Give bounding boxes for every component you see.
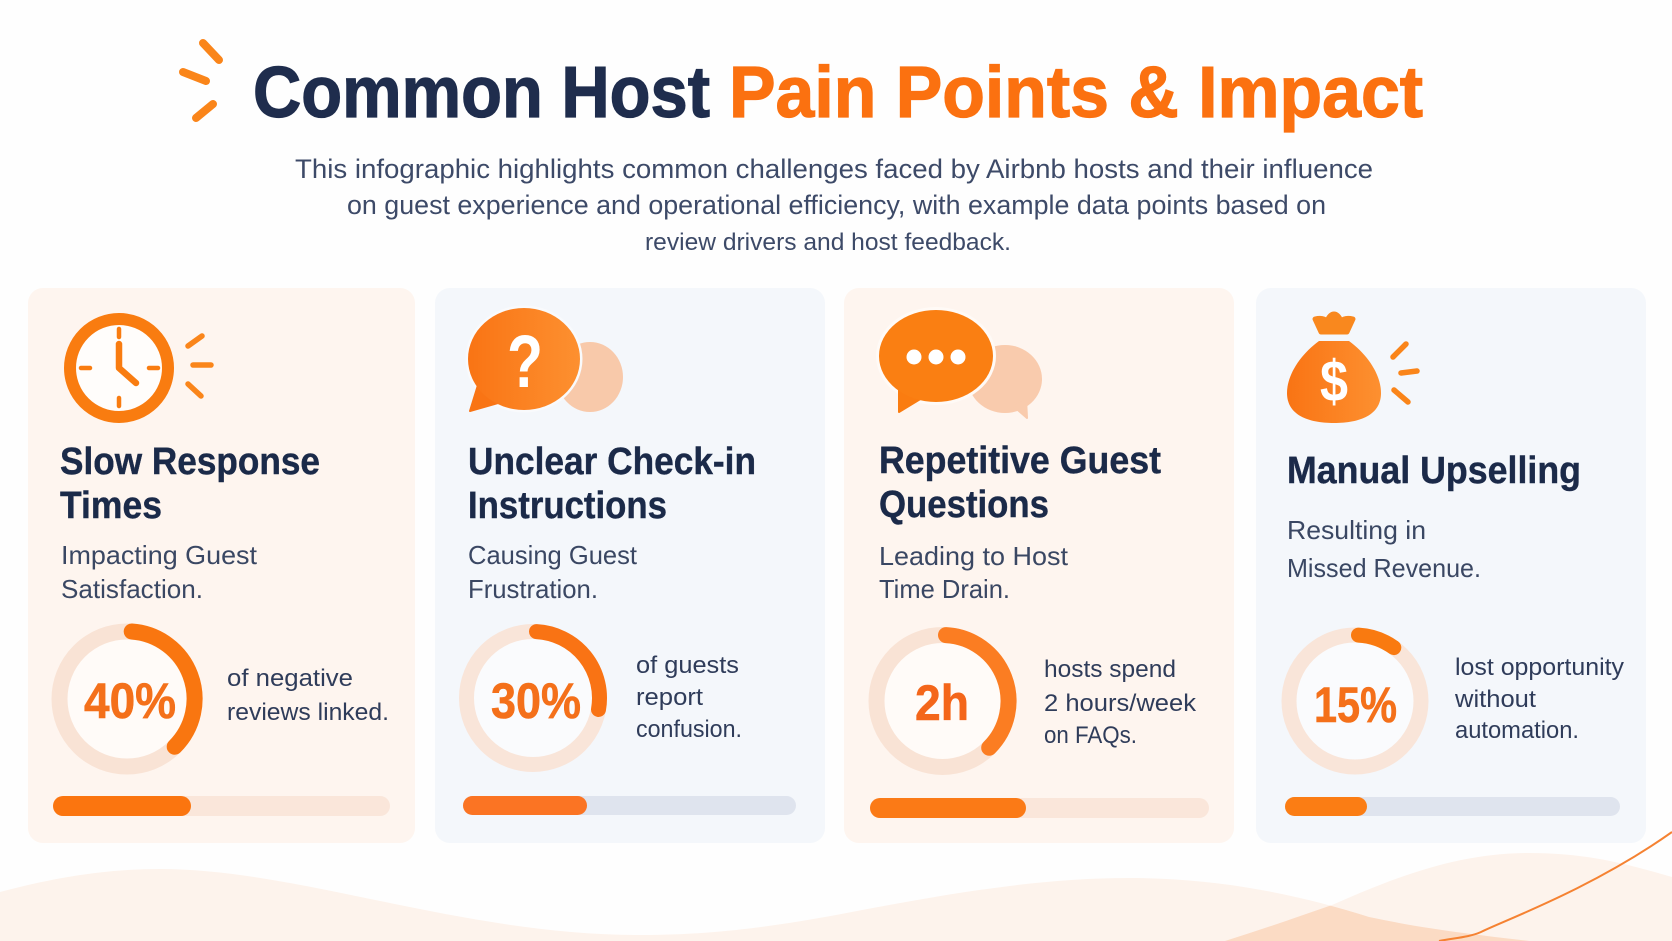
description: Resulting in	[1287, 515, 1426, 545]
subtitle: review drivers and host feedback.	[645, 229, 1011, 256]
heading: Instructions	[468, 485, 667, 527]
description: Leading to Host	[879, 541, 1069, 571]
panel: slow response times	[28, 288, 415, 843]
title: Common Host	[253, 53, 710, 133]
heading: Unclear Check-in	[468, 441, 756, 483]
title	[253, 53, 1423, 133]
panel: repetitive guest questions	[844, 288, 1234, 843]
stat text: hosts spend	[1044, 656, 1176, 683]
description: Causing Guest	[468, 540, 638, 570]
donut chart: 2h	[876, 635, 1009, 767]
icon: clock	[70, 319, 211, 417]
stat text: on FAQs.	[1044, 722, 1137, 749]
subtitle: on guest experience and operational efficiency, with example data points based on	[347, 190, 1326, 220]
panel: unclear check-in instructions	[435, 288, 825, 843]
progress bar	[53, 796, 390, 816]
donut chart: 15%	[1289, 635, 1421, 767]
heading: Times	[60, 485, 162, 527]
background waves	[0, 832, 1672, 941]
stat text	[1454, 654, 1624, 744]
description	[1287, 515, 1481, 583]
stat text: 2 hours/week	[1044, 690, 1197, 717]
stat text	[1044, 656, 1197, 749]
panel: manual upselling	[1256, 288, 1646, 843]
description: Time Drain.	[879, 574, 1010, 604]
donut chart: 2h: 2h	[915, 675, 969, 731]
icon: chat bubbles	[876, 307, 1042, 418]
description	[468, 540, 638, 604]
description: Satisfaction.	[61, 574, 203, 604]
donut chart: 30%	[466, 632, 600, 764]
stat text: reviews linked.	[227, 699, 389, 726]
title: Pain Points & Impact	[729, 53, 1423, 133]
subtitle: This infographic highlights common challenges faced by Airbnb hosts and their influence	[295, 154, 1373, 184]
heading: Slow Response	[60, 441, 320, 483]
description	[61, 540, 258, 604]
stat text: lost opportunity	[1455, 654, 1624, 681]
stat text	[227, 665, 389, 726]
heading: Manual Upselling	[1287, 450, 1581, 492]
progress bar	[1285, 797, 1620, 816]
stat text: report	[636, 684, 703, 711]
icon: question bubbles: ?	[507, 320, 543, 403]
heading: Questions	[879, 484, 1049, 526]
donut chart: 15%: 15%	[1314, 677, 1397, 733]
description: Impacting Guest	[61, 540, 258, 570]
icon: question bubbles	[466, 306, 623, 412]
subtitle	[295, 154, 1373, 256]
stat text	[636, 652, 742, 743]
icon: money bag: $	[1320, 349, 1348, 414]
progress bar	[463, 796, 796, 815]
donut chart: 30%: 30%	[491, 673, 581, 729]
stat text: of negative	[227, 665, 353, 692]
stat text: confusion.	[636, 716, 742, 743]
icon: title sparkle	[183, 43, 219, 118]
heading	[468, 441, 756, 527]
donut chart: 40%: 40%	[84, 673, 176, 729]
heading	[879, 440, 1161, 526]
stat text: of guests	[636, 652, 739, 679]
icon: money bag	[1287, 314, 1417, 423]
description: Missed Revenue.	[1287, 553, 1481, 583]
stat text: without	[1454, 686, 1536, 713]
heading: Repetitive Guest	[879, 440, 1161, 482]
stat text: automation.	[1455, 717, 1579, 744]
heading	[60, 441, 320, 527]
progress bar	[870, 798, 1209, 818]
description	[879, 541, 1069, 604]
donut chart: 40%	[60, 632, 195, 766]
description: Frustration.	[468, 574, 598, 604]
